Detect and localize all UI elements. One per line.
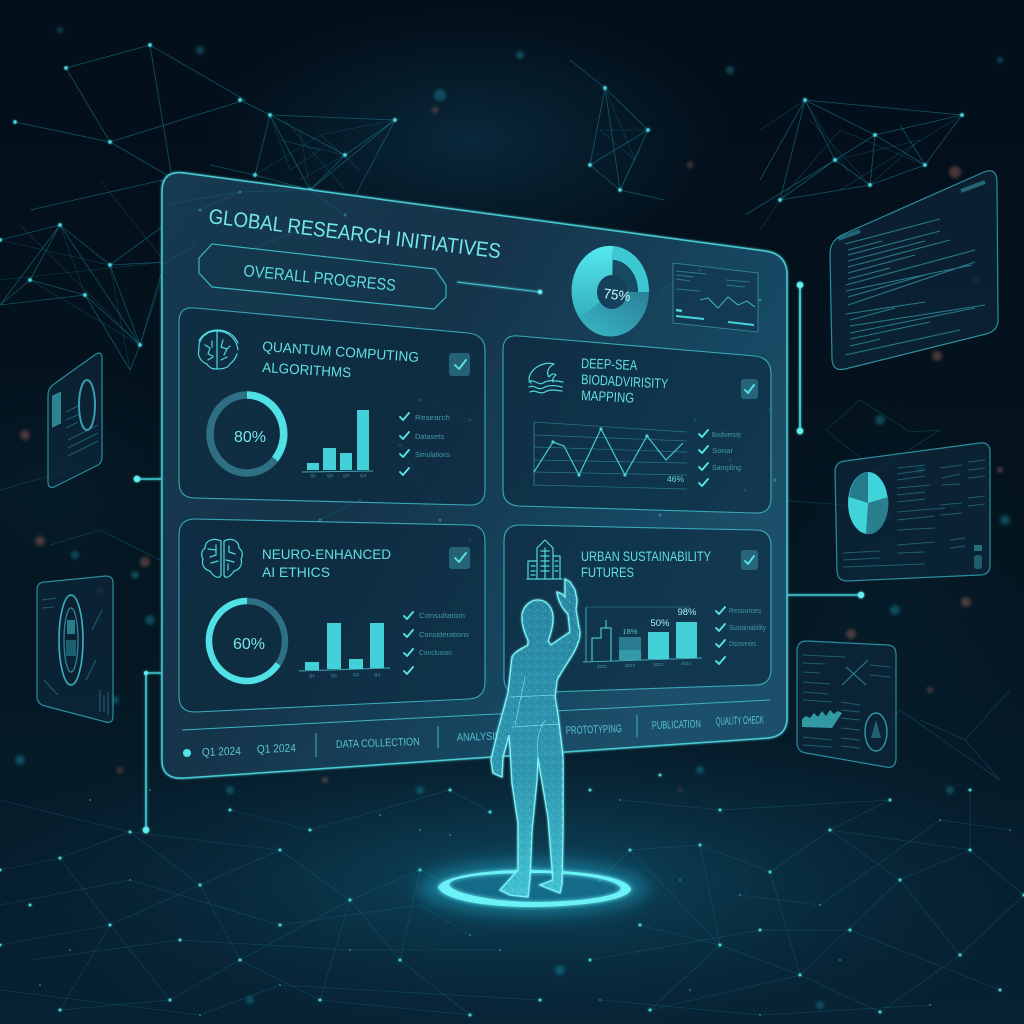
checkbox bbox=[449, 353, 470, 376]
connector: pill to donut bbox=[457, 282, 542, 294]
panel: left floating card lower bbox=[37, 576, 113, 722]
timeline bbox=[182, 700, 770, 759]
overall donut 75% bbox=[572, 246, 649, 337]
card: deep-sea biodiversity: BIODADVIRISITY bbox=[581, 371, 669, 392]
human silhouette bbox=[485, 575, 585, 900]
checkbox bbox=[449, 547, 470, 569]
checklist bbox=[404, 612, 470, 674]
platform glow ring bbox=[418, 862, 648, 914]
checkbox bbox=[741, 379, 758, 399]
network seen through panel bbox=[162, 190, 775, 620]
checkbox bbox=[741, 550, 758, 570]
progress ring 60% bbox=[209, 601, 285, 681]
bar chart with city outline: 2022 bbox=[625, 663, 636, 668]
icon: brain bbox=[202, 539, 242, 577]
bar chart: Q3 bbox=[353, 672, 359, 677]
network: floor mesh bbox=[0, 775, 1024, 1015]
checklist: Simulations bbox=[415, 452, 450, 459]
mini chart panel bbox=[673, 263, 758, 332]
timeline: DATA COLLECTION bbox=[336, 736, 420, 751]
bar chart with city outline: 98% bbox=[677, 607, 697, 618]
connector: upper right vertical bbox=[797, 282, 803, 434]
card: quantum computing bbox=[179, 308, 485, 505]
timeline: Q1 2024 bbox=[257, 743, 297, 756]
heading: NEURO-ENHANCED bbox=[262, 546, 391, 562]
connector: right horizontal bbox=[787, 592, 864, 598]
card: neuro-enhanced bbox=[179, 519, 485, 712]
progress ring 80% bbox=[210, 395, 284, 473]
checklist: Discoveries bbox=[729, 641, 756, 648]
checklist: Sonar bbox=[712, 448, 734, 455]
bar chart: Q4 bbox=[360, 473, 366, 478]
bar chart: Q1 bbox=[310, 473, 316, 478]
overall progress pill bbox=[199, 244, 446, 309]
bar chart: Q2 bbox=[331, 673, 337, 678]
timeline: PROTOTYPING bbox=[566, 723, 622, 737]
network nodes: upper area bbox=[0, 45, 962, 345]
card: urban sustainability: FUTURES bbox=[581, 564, 634, 580]
card: neuro-enhanced: AI ETHICS bbox=[262, 564, 330, 580]
checklist bbox=[699, 430, 741, 486]
line chart bbox=[534, 422, 687, 489]
bar chart: Q2 bbox=[327, 473, 333, 478]
panel: right bottom card bbox=[797, 641, 896, 767]
checklist: Sustainability bbox=[729, 625, 766, 632]
timeline: QUALITY CHECK bbox=[716, 714, 764, 728]
connector: lower left elbow bbox=[143, 671, 162, 833]
panel: main dashboard bbox=[162, 173, 787, 778]
card: deep-sea biodiversity: MAPPING bbox=[581, 387, 635, 406]
heading: URBAN SUSTAINABILITY bbox=[581, 548, 712, 564]
bar chart: Q1 bbox=[309, 673, 315, 678]
bar chart with city outline bbox=[583, 607, 702, 669]
checklist: Conclusion bbox=[419, 650, 452, 657]
network: top and side constellations bbox=[0, 45, 1010, 780]
checklist: Biodiversity bbox=[712, 432, 741, 439]
bar chart with city outline: 18% bbox=[622, 627, 638, 636]
connector: left horizontal bbox=[134, 476, 162, 482]
holographic figure on platform bbox=[418, 575, 648, 914]
bar chart bbox=[302, 410, 373, 478]
bar chart with city outline: 50% bbox=[650, 618, 670, 629]
checklist: Sampling bbox=[712, 465, 741, 472]
progress ring 80%: 80% bbox=[234, 429, 266, 446]
icon: quantum brain bbox=[198, 330, 238, 369]
timeline: Q1 2024 bbox=[202, 746, 242, 759]
line chart: 46% bbox=[667, 474, 684, 484]
checklist: Datasets bbox=[415, 434, 445, 441]
progress ring 60%: 60% bbox=[233, 636, 265, 653]
checklist: Research bbox=[415, 415, 450, 422]
bar chart: Q4 bbox=[374, 672, 380, 677]
overall donut 75%: 75% bbox=[603, 285, 631, 304]
heading: QUANTUM COMPUTING bbox=[262, 338, 420, 365]
icon: city bbox=[527, 540, 562, 579]
bar chart with city outline: 2024 bbox=[681, 661, 692, 666]
timeline: ANALYSIS bbox=[457, 730, 501, 744]
panel: right pie chart card bbox=[835, 443, 990, 581]
overall progress pill: OVERALL PROGRESS bbox=[243, 262, 397, 295]
icon: wave bbox=[529, 363, 563, 393]
checklist: Considerations bbox=[419, 632, 470, 639]
title: GLOBAL RESEARCH INITIATIVES bbox=[207, 205, 502, 263]
panel: right document card bbox=[830, 171, 998, 370]
bar chart: Q3 bbox=[343, 473, 349, 478]
card: deep-sea biodiversity bbox=[503, 336, 771, 513]
checklist bbox=[716, 607, 766, 664]
bar chart bbox=[299, 623, 390, 678]
card: quantum computing: ALGORITHMS bbox=[262, 359, 352, 380]
bar chart with city outline: 2023 bbox=[653, 662, 664, 667]
card: urban sustainability bbox=[504, 525, 771, 693]
panel: left floating card upper bbox=[48, 353, 102, 487]
bar chart with city outline: 2021 bbox=[597, 664, 608, 669]
checklist: Consultation bbox=[419, 613, 465, 620]
checklist bbox=[400, 413, 450, 475]
heading: DEEP-SEA bbox=[581, 355, 638, 373]
checklist: Resources bbox=[729, 608, 761, 615]
timeline: PUBLICATION bbox=[652, 718, 701, 732]
